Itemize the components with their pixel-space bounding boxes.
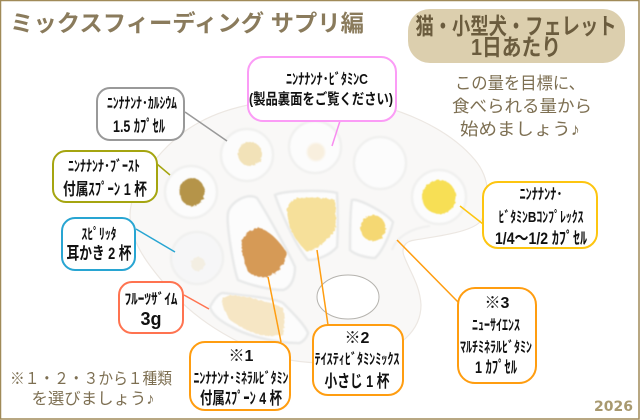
callout: calcium: 1.5 ｶﾌﾟｾﾙ	[113, 117, 165, 136]
callout: vitamin C: ﾆﾝﾅﾅﾝﾅ･ﾋﾞﾀﾐﾝC	[286, 71, 368, 88]
callout: vitamin B: ﾋﾞﾀﾐﾝBｺﾝﾌﾟﾚｯｸｽ	[498, 209, 584, 226]
callout: fruit zyme: ﾌﾙｰﾂｻﾞｲﾑ	[124, 291, 178, 308]
palette tray	[130, 99, 488, 363]
panel: target animals: 1日あたり	[471, 34, 561, 60]
arrow: nu-science line	[397, 240, 459, 303]
powder: tasty vitamin mix	[287, 198, 336, 252]
powder: vitamin B	[422, 180, 456, 214]
title: ミックスフィーディング サプリ編	[10, 10, 364, 36]
hole	[317, 275, 379, 319]
callout: tasty vitamin mix: 小さじ 1 杯	[324, 371, 390, 391]
callout: vitamin C	[248, 57, 396, 121]
callout: tasty vitamin mix: ※2	[345, 330, 370, 347]
callout: spirulina	[62, 218, 135, 270]
text block: note	[10, 370, 172, 408]
callout: tasty vitamin mix	[313, 325, 403, 395]
callout: vitamin B: ﾆﾝﾅﾅﾝﾅ･	[520, 186, 562, 203]
arrow: tasty vitamin mix line	[317, 250, 328, 325]
wells	[165, 121, 466, 343]
powder: calcium	[238, 142, 262, 166]
thumb rim	[392, 226, 430, 250]
text block: advice: 食べられる量から	[452, 97, 592, 116]
powder: boost	[180, 178, 204, 206]
arrow: mineral vitamin line	[268, 277, 281, 342]
arrow: spirulina line	[136, 229, 175, 252]
arrow: vitamin C line	[332, 121, 340, 146]
text block: advice: この量を目標に、	[455, 74, 585, 93]
year: 2026	[594, 399, 633, 415]
callout: mineral vitamin: ※1	[229, 348, 254, 365]
callout: nu-science: ﾏﾙﾁﾐﾈﾗﾙﾋﾞﾀﾐﾝ	[460, 339, 532, 356]
callout: nu-science: ※3	[485, 295, 510, 312]
callout: calcium: ﾆﾝﾅﾅﾝﾅ･ｶﾙｼｳﾑ	[107, 95, 177, 112]
callout: mineral vitamin: 付属ｽﾌﾟｰﾝ 4 杯	[200, 388, 282, 408]
callout: spirulina: ｽﾋﾟﾘｯﾀ	[82, 226, 116, 243]
callout: vitamin C: (製品裏面をご覧ください)	[249, 90, 393, 108]
powder: spirulina	[191, 257, 205, 271]
panel: target animals	[408, 9, 625, 63]
callout: nu-science: ﾆｭｰｻｲｴﾝｽ	[472, 317, 520, 334]
callout: vitamin B	[483, 182, 597, 248]
callout: calcium	[97, 88, 184, 140]
powder: small vitamin	[360, 215, 386, 241]
powder: mineral vitamin	[241, 228, 287, 277]
callout: mineral vitamin: ﾆﾝﾅﾅﾝﾅ･ﾐﾈﾗﾙﾋﾞﾀﾐﾝ	[194, 370, 288, 387]
callout: fruit zyme: 3g	[140, 309, 162, 329]
powder: vitamin C	[307, 143, 325, 161]
callout: boost	[53, 151, 157, 202]
callout: mineral vitamin	[190, 342, 290, 410]
text block: note: ※１・２・３から１種類	[10, 370, 172, 388]
callout: tasty vitamin mix: ﾃｲｽﾃｨﾋﾞﾀﾐﾝﾐｯｸｽ	[314, 351, 400, 368]
callout: nu-science	[458, 288, 536, 383]
callout: spirulina: 耳かき 2 杯	[66, 243, 132, 263]
text block: advice	[452, 74, 592, 139]
text block: note: を選びましょう♪	[32, 390, 154, 408]
callout: fruit zyme	[119, 282, 183, 333]
arrow: calcium line	[185, 112, 227, 141]
text block: advice: 始めましょう♪	[460, 120, 580, 139]
powder: fruit zyme	[222, 295, 284, 336]
callout: boost: ﾆﾝﾅﾅﾝﾅ･ﾌﾞｰｽﾄ	[68, 158, 140, 175]
arrow: fruit zyme line	[184, 295, 209, 309]
callout: boost: 付属ｽﾌﾟｰﾝ 1 杯	[63, 179, 147, 199]
arrow: boost line	[157, 164, 170, 175]
callout: nu-science: 1 ｶﾌﾟｾﾙ	[475, 358, 517, 377]
callout: vitamin B: 1/4～1/2 ｶﾌﾟｾﾙ	[495, 229, 587, 248]
arrow: vitamin B line	[460, 206, 483, 224]
